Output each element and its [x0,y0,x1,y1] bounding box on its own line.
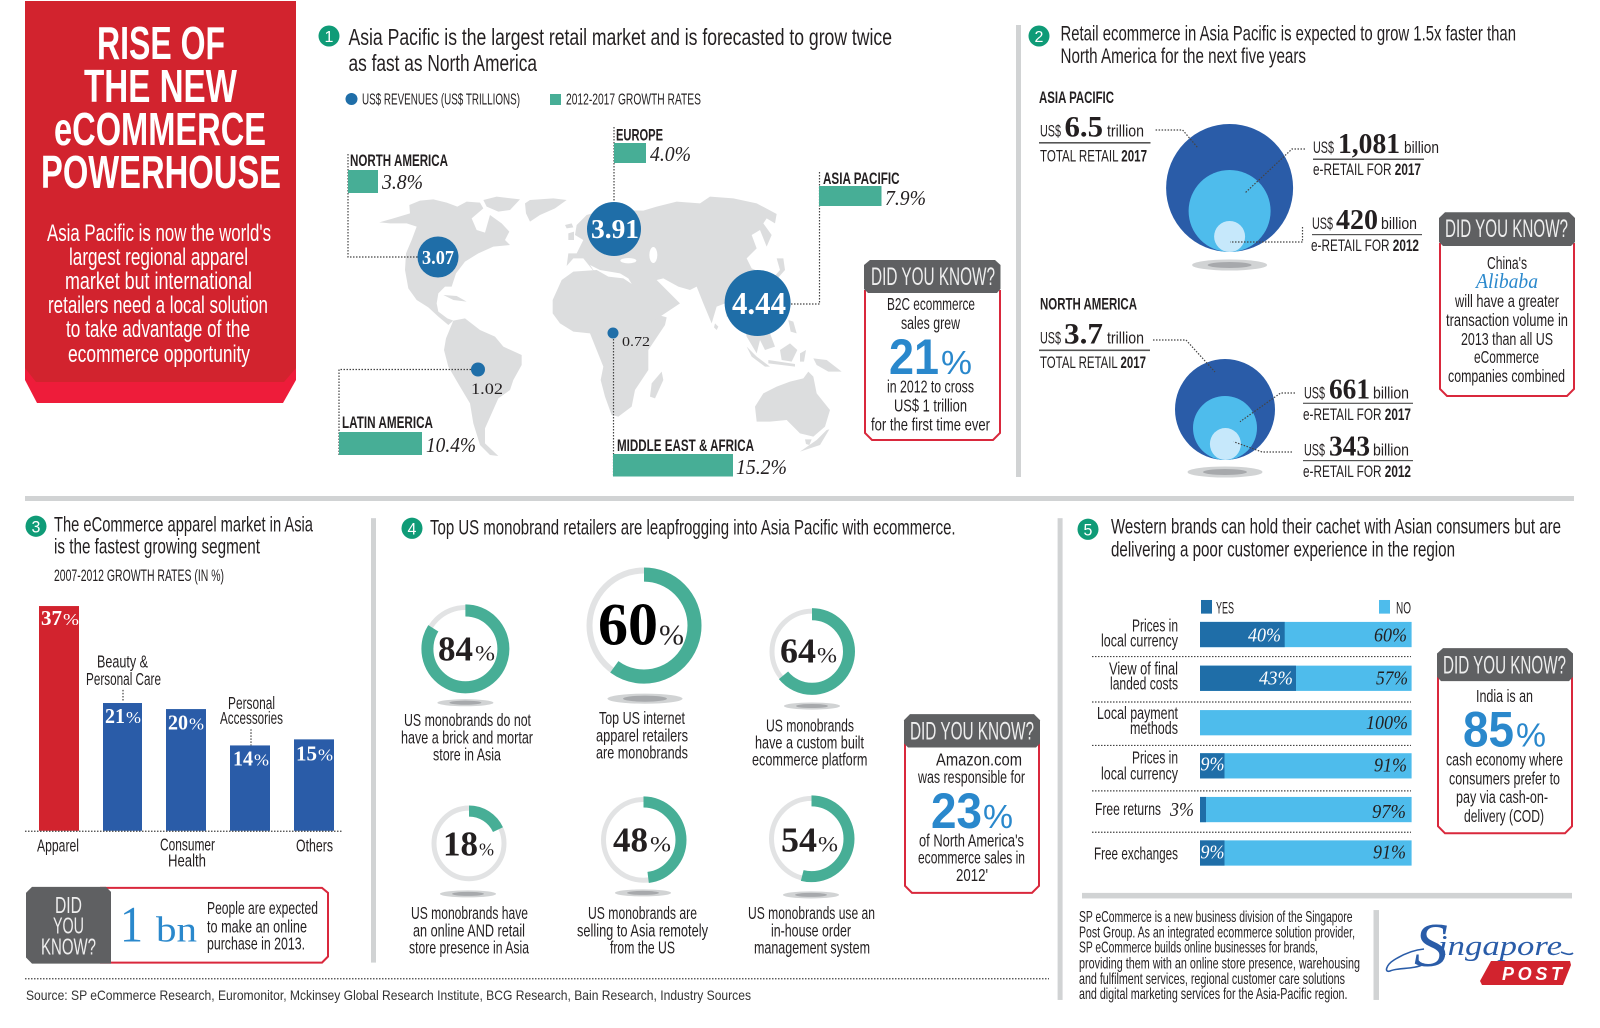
callout: did you know 1 bn: KNOW? [41,933,96,960]
callout: Asia Pacific: ASIA PACIFIC [823,170,900,188]
donut: 60%: % [659,620,684,651]
stacked bar chart: 43% [1259,667,1293,690]
source note: Source: SP eCommerce Research, Euromonitor, Mckinsey Global Research Institute, BCG Research, Bain Research, Industry Sources [26,987,751,1003]
badge 3 [26,516,46,537]
donut: 84%: 84 [438,629,473,669]
callout: did you know Amazon: ecommerce sales in [918,848,1025,868]
donut: 54%: 54 [781,820,817,860]
North America bubble chart: billion [1373,441,1409,460]
donut: 60%: Top US internet [599,709,685,728]
heading 3: 2007-2012 GROWTH RATES (IN %) [54,567,224,585]
logo: Singapore Post: POST [1502,964,1564,984]
callout: Latin America: LATIN AMERICA [342,414,433,432]
donut: 48%: 48 [613,820,648,860]
callout: North America [348,152,458,278]
donut: 64%: ecommerce platform [752,751,867,770]
callout: did you know Alibaba: Alibaba [1474,269,1538,293]
heading 1: Asia Pacific is the largest retail market and is forecasted to grow twice [348,24,892,50]
Asia Pacific bubble chart: 1,081 [1338,129,1400,160]
North America bubble chart: billion [1373,384,1409,402]
title: eCOMMERCE [54,103,266,155]
lower half [25,513,1573,1003]
donut: 54%: % [818,831,838,857]
callout: Middle East and Africa [608,328,787,479]
bar chart: % [254,751,269,770]
intro text: ecommerce opportunity [68,341,250,368]
North America bubble chart: e-RETAIL FOR 2012 [1303,462,1411,481]
callout: did you know 1 bn: purchase in 2013. [207,934,305,953]
North America bubble chart: TOTAL RETAIL 2017 [1040,353,1146,372]
donut: 84%: store in Asia [433,746,501,765]
donut: 84%: % [475,640,495,666]
panel: section 5 customer experience [1078,515,1573,1003]
heading 3: is the fastest growing segment [54,535,260,559]
logo: Singapore Post [1387,912,1573,985]
donut: 64%: US monobrands [766,716,854,735]
bar chart: 21 [105,704,125,728]
North America bubble chart: US$ [1040,328,1061,347]
callout: did you know 1 bn: DID [55,892,82,918]
stacked bar legend [1201,600,1411,618]
North America bubble chart: 661 [1329,374,1370,406]
bar chart: Apparel [37,836,79,855]
callout: did you know Alibaba: China's [1487,253,1527,273]
heading 3: The eCommerce apparel market in Asia [54,513,313,536]
donut: 84%: have a brick and mortar [401,728,533,747]
callout: Latin America: 1.02 [471,381,503,398]
title: RISE OF [97,17,225,69]
callout: did you know Amazon: DID YOU KNOW? [910,717,1034,745]
bar chart: % [189,714,204,733]
stacked bar chart: 60% [1374,624,1407,646]
callout: did you know B2C: % [941,344,972,381]
heading 1 [348,24,892,76]
stacked bar chart: 9% [1200,841,1224,864]
callout: did you know 1 bn: YOU [53,912,84,938]
donut: 54%: in-house order [771,921,851,940]
about SP eCommerce text: Post Group. As an integrated ecommerce solution provider, [1079,924,1355,941]
callout: Europe: EUROPE [616,127,663,145]
callout: did you know 1 bn: to make an online [207,917,307,936]
stacked bar chart: methods [1130,719,1178,738]
Asia Pacific bubble chart: e-RETAIL FOR 2017 [1313,160,1421,179]
callout: Asia Pacific: 7.9% [885,186,926,210]
donut: 60%: apparel retailers [596,726,688,745]
callout: did you know Amazon [904,714,1040,893]
stacked bar chart: local currency [1101,631,1178,650]
donut: 84%: US monobrands do not [404,711,531,730]
intro text: market but international [65,268,252,295]
callout: did you know B2C: US$ 1 trillion [894,396,967,416]
callout: Europe [587,127,691,256]
callout: did you know India: India is an [1476,686,1533,706]
bar chart: Accessories [220,709,283,728]
intro text: retailers need a local solution [48,292,268,319]
badge 4 [402,518,422,539]
callout: did you know Amazon: % [983,799,1013,836]
callout: did you know Amazon: Amazon.com [936,750,1022,770]
Asia Pacific bubble chart: billion [1381,214,1417,233]
panel: section 3 apparel market [25,513,343,964]
stacked bar legend: NO [1396,600,1411,618]
logo: Singapore Post: ingapore [1438,931,1562,962]
donut: 54%: management system [754,938,870,958]
stacked bar chart: View of final [1109,659,1178,678]
intro text: to take advantage of the [66,316,250,343]
bar chart: 14 [233,747,253,771]
stacked bar chart: Prices in [1132,616,1178,635]
logo: Singapore Post: S [1414,912,1448,980]
bar chart: Personal Care [86,670,161,689]
Asia Pacific bubble chart: ASIA PACIFIC [1039,88,1114,107]
Asia Pacific bubble chart [1039,88,1439,270]
heading 2 [1060,23,1516,68]
callout: Latin America: 10.4% [426,433,476,457]
badge 4: 4 [408,520,417,538]
North America bubble chart: US$ [1304,384,1325,402]
North America bubble chart: US$ [1304,441,1325,460]
callout: did you know 1 bn: People are expected [207,899,318,918]
stacked bar chart: 91% [1373,841,1406,864]
callout: did you know B2C: 21 [889,329,939,385]
about SP eCommerce text [1079,909,1360,1003]
world map [379,197,842,456]
donut: 48%: from the US [610,938,675,958]
stacked bar chart: 9% [1200,754,1224,776]
donut: 18%: US monobrands have [411,904,528,923]
callout: did you know Alibaba: 2013 than all US [1461,329,1553,349]
badge 5: 5 [1084,521,1093,539]
intro text: Asia Pacific is now the world's [47,220,271,247]
callout: did you know B2C: for the first time ever [871,415,990,435]
badge 3: 3 [32,518,41,536]
callout: Middle East and Africa: MIDDLE EAST & AFRICA [617,437,754,455]
Asia Pacific bubble chart: e-RETAIL FOR 2012 [1311,236,1419,255]
Asia Pacific bubble chart: trillion [1107,122,1144,141]
callout: did you know Alibaba [1439,212,1575,396]
callout: Latin America [339,362,503,457]
donut: 48%: % [650,831,671,857]
North America bubble chart [1039,294,1413,481]
callout: did you know B2C: DID YOU KNOW? [871,263,995,291]
donut: 64%: have a custom built [755,733,864,752]
about SP eCommerce text: providing them with an online store presence, warehousing [1079,955,1360,972]
North America bubble chart: trillion [1107,328,1144,347]
callout: did you know Amazon: 23 [931,783,982,839]
badge 2 [1028,26,1050,46]
bar chart: Health [168,852,206,871]
stacked bar chart [1092,616,1412,866]
Asia Pacific bubble chart: TOTAL RETAIL 2017 [1040,147,1147,166]
badge 1: 1 [325,29,334,46]
callout: Middle East and Africa: 0.72 [622,335,650,350]
stacked bar chart: 91% [1374,754,1407,776]
donut: 18%: store presence in Asia [409,938,529,958]
bar chart: 20 [168,710,188,734]
about SP eCommerce text: SP eCommerce builds online businesses for brands, [1079,939,1318,956]
stacked bar chart: landed costs [1110,675,1178,694]
stacked bar chart: 3% [1169,799,1194,821]
callout: did you know B2C: sales grew [901,313,960,333]
Asia Pacific bubble chart: US$ [1312,214,1333,233]
callout: did you know India: consumers prefer to [1449,768,1560,789]
callout: Middle East and Africa: 15.2% [736,455,787,479]
callout: did you know India [1437,648,1573,833]
donut: 84% [401,607,533,765]
panel: section 2 retail ecommerce growth [1028,23,1575,481]
heading 3 [54,513,313,585]
callout: Europe: 4.0% [650,142,691,166]
callout: did you know B2C [864,260,1000,440]
title: THE NEW [84,60,237,112]
stacked bar chart: 97% [1372,801,1406,823]
bar chart: Personal [228,694,275,713]
callout: Asia Pacific: 4.44 [732,285,786,321]
title: POWERHOUSE [41,146,281,198]
callout: North America: NORTH AMERICA [350,152,448,170]
callout: did you know 1 bn: 1 [120,896,143,952]
about SP eCommerce text: and digital marketing services for the Asia-Pacific region. [1079,986,1347,1003]
bar chart: % [126,708,141,727]
bar chart: % [63,610,79,629]
donut: 64%: 64 [780,631,816,671]
callout: did you know Amazon: 2012' [956,865,988,885]
Asia Pacific bubble chart: 420 [1336,205,1378,236]
donut: 64% [752,611,868,770]
bar chart: Beauty & [97,653,148,672]
panel: section 1 world market [318,24,1000,479]
stacked bar chart: Local payment [1097,704,1178,723]
bar chart [25,606,343,871]
North America bubble chart: 343 [1329,432,1370,463]
callout: did you know Amazon: was responsible for [917,767,1025,787]
heading 1: as fast as North America [348,50,537,76]
callout: Asia Pacific [725,170,926,336]
stacked bar chart: Free returns [1095,800,1161,819]
stacked bar chart: Prices in [1132,749,1178,768]
panel: title banner [25,1,296,403]
heading 5 [1111,515,1561,562]
about SP eCommerce text: SP eCommerce is a new business division of the Singapore [1079,909,1352,926]
bar chart: Others [296,836,333,855]
about SP eCommerce text: and fulfilment services, regional customer care solutions [1079,971,1345,988]
donut: 48%: US monobrands are [588,904,697,923]
badge 5 [1078,519,1098,540]
donut: 60%: 60 [598,591,658,658]
callout: did you know Amazon: of North America's [919,830,1024,850]
callout: did you know India: % [1516,717,1546,754]
donut: 54% [748,798,875,958]
panel: section 4 monobrand retailers [401,516,1040,958]
bar chart: 37 [41,606,62,630]
donut: 18%: 18 [443,824,478,864]
callout: did you know Alibaba: eCommerce [1474,347,1539,367]
Asia Pacific bubble chart: 6.5 [1064,111,1103,144]
badge 1 [318,26,340,46]
intro text: largest regional apparel [69,244,248,271]
callout: did you know India: delivery (COD) [1464,806,1544,826]
donut: 60%: are monobrands [596,743,688,763]
stacked bar chart: 40% [1248,624,1281,646]
bar chart: 15 [296,741,317,766]
callout: did you know India: 85 [1463,701,1514,757]
heading 5: delivering a poor customer experience in the region [1111,538,1455,562]
callout: did you know 1 bn [26,887,328,964]
intro text [47,220,271,368]
stacked bar chart: Free exchanges [1094,844,1178,864]
donut: 64%: % [817,643,837,668]
Asia Pacific bubble chart: US$ [1313,138,1334,157]
North America bubble chart: NORTH AMERICA [1040,294,1137,313]
donut: 48%: selling to Asia remotely [577,921,708,940]
title [41,17,281,198]
heading 4: Top US monobrand retailers are leapfrogging into Asia Pacific with ecommerce. [430,516,956,539]
donut: 48% [577,799,708,958]
donut: 60% [590,570,698,763]
callout: did you know Alibaba: will have a greater [1454,291,1559,311]
heading 2: North America for the next five years [1060,45,1306,68]
donut: 54%: US monobrands use an [748,904,875,923]
donut: 18% [409,808,529,958]
stacked bar chart: local currency [1101,764,1178,783]
Asia Pacific bubble chart: billion [1404,138,1439,157]
stacked bar legend: YES [1216,600,1234,618]
callout: did you know B2C: B2C ecommerce [887,294,975,314]
callout: North America: 3.07 [422,247,454,269]
stacked bar chart: 57% [1376,667,1408,690]
North America bubble chart: e-RETAIL FOR 2017 [1303,405,1411,424]
legend: 2012-2017 GROWTH RATES [566,92,701,109]
badge 2: 2 [1035,29,1044,46]
callout: North America: 3.8% [381,170,423,194]
Asia Pacific bubble chart: US$ [1040,122,1061,141]
callout: did you know B2C: in 2012 to cross [887,377,974,397]
stacked bar chart: 100% [1366,712,1408,734]
legend: US$ REVENUES (US$ TRILLIONS) [362,92,520,109]
North America bubble chart: 3.7 [1064,317,1103,350]
donut: 18%: % [479,839,494,860]
callout: Europe: 3.91 [591,214,639,244]
callout: did you know India: pay via cash-on- [1456,787,1548,807]
bar chart: % [318,746,333,765]
callout: did you know 1 bn: bn [156,909,197,949]
donut: 18%: an online AND retail [413,921,525,940]
bar chart: Consumer [160,835,215,854]
